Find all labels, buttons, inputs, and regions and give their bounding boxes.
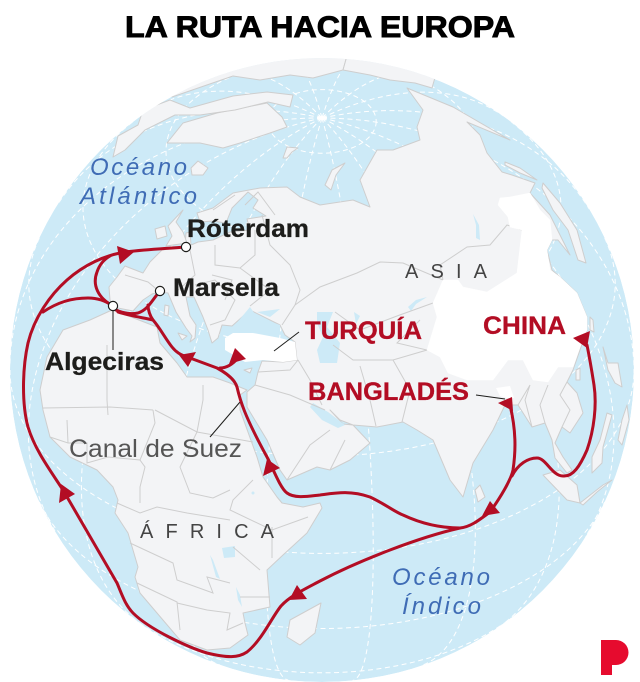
country labels: CHINA: [483, 312, 566, 340]
Suez label: Canal de Suez: [69, 435, 242, 463]
Sulawesi and New Guinea edge: [618, 405, 629, 445]
route: Algeciras to Rotterdam link: [95, 256, 113, 306]
Canada north: [172, 58, 346, 98]
Tana: [252, 492, 254, 494]
China highlighted: [427, 193, 587, 382]
title: LA RUTA HACIA EUROPA: [125, 11, 515, 44]
Turkey highlighted: [225, 333, 297, 362]
Azov: [257, 309, 280, 317]
Africa: [40, 310, 322, 650]
Svalbard: [283, 147, 298, 158]
route: Algeciras to Suez: [118, 312, 490, 528]
Greenland: [167, 103, 287, 148]
route: Atlantic to Algeciras: [43, 298, 113, 312]
Eurasia: [109, 88, 587, 497]
Victoria: [222, 546, 235, 558]
Taiwan: [590, 317, 594, 332]
route: Turkey branch: [220, 358, 238, 368]
Black Sea: [238, 307, 280, 326]
Sri Lanka: [475, 485, 485, 502]
Caspian Sea: [317, 312, 340, 363]
route arrowheads: [59, 246, 590, 600]
Borneo: [592, 413, 612, 473]
continent labels: ÁFRICA: [140, 520, 275, 543]
route: Indian Ocean around Africa to Rotterdam: [24, 247, 460, 657]
Alaska and Chukotka: [342, 59, 435, 88]
Sicily and Sardinia: [164, 305, 169, 316]
continent labels: [140, 261, 488, 543]
Balkhash: [408, 297, 427, 311]
Ireland: [155, 226, 167, 239]
Malawi: [236, 587, 242, 607]
port labels: Róterdam: [187, 215, 309, 243]
ocean labels: Océano: [392, 564, 490, 591]
Tanganyika: [210, 555, 220, 579]
inland seas and lakes: [210, 214, 480, 607]
Iceland: [191, 161, 208, 175]
country labels: [305, 312, 566, 406]
ocean labels: Océano: [90, 154, 187, 181]
Sakhalin chain: [542, 183, 586, 263]
Madagascar: [287, 603, 321, 645]
Aral Sea: [354, 312, 360, 324]
route: Bangladesh branch: [490, 405, 515, 512]
Philippines: [603, 347, 622, 387]
Great Britain: [166, 210, 187, 246]
Novaya Zemlya: [325, 163, 345, 190]
ocean labels: [78, 154, 490, 620]
country borders: [43, 192, 570, 630]
Persian Gulf: [310, 403, 345, 428]
Hainan: [576, 368, 580, 380]
route: China branch: [512, 345, 595, 476]
continent labels: ASIA: [405, 261, 488, 283]
Baffin and Labrador: [113, 92, 293, 157]
ocean labels: Atlántico: [78, 183, 197, 210]
country labels: BANGLADÉS: [308, 377, 469, 406]
ocean labels: Índico: [402, 593, 481, 620]
port labels: Marsella: [173, 274, 280, 302]
port markers: [108, 242, 191, 311]
route: Marseille branch: [148, 305, 153, 320]
logo: [601, 640, 628, 675]
Bangladesh highlighted: [496, 386, 514, 398]
port labels: Algeciras: [45, 348, 164, 376]
route: Algeciras to Marseille: [116, 291, 160, 314]
Java: [580, 480, 612, 505]
leader lines: [113, 306, 505, 437]
Cyprus: [244, 368, 252, 373]
port labels: [45, 215, 309, 376]
shipping routes: [24, 247, 595, 657]
Baikal: [473, 214, 480, 240]
Sumatra: [543, 470, 580, 503]
country labels: TURQUÍA: [305, 316, 422, 345]
